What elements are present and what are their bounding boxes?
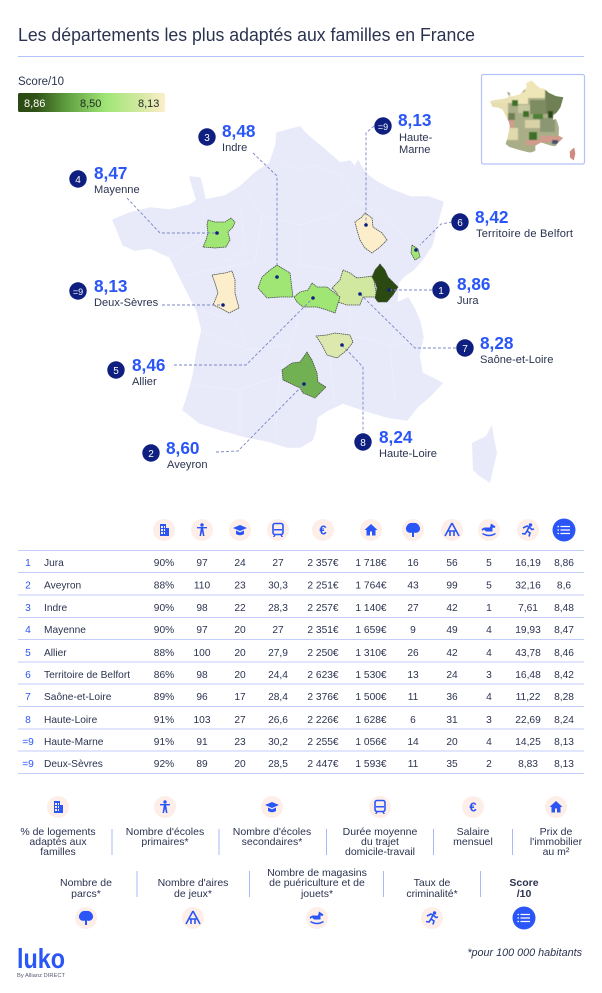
inset map of France xyxy=(482,74,584,164)
table row: Jura: 5 xyxy=(486,558,492,569)
table header icons xyxy=(153,518,576,542)
table row: Aveyron: 43 xyxy=(407,580,419,592)
department: Saône-et-Loire xyxy=(332,270,377,305)
table row: Jura: 97 xyxy=(196,558,208,569)
table row: Aveyron: 5 xyxy=(486,580,492,592)
table row: Saône-et-Loire: 8,28 xyxy=(554,692,574,703)
key: second row labels: jouets* xyxy=(300,888,333,900)
table row: Deux-Sèvres: 28,5 xyxy=(268,759,288,770)
table row: Territoire de Belfort: 13 xyxy=(407,670,419,681)
department: Jura xyxy=(372,264,398,302)
table row: Deux-Sèvres: 89 xyxy=(196,759,208,770)
table row: Jura: 1 718€ xyxy=(355,558,387,569)
table row: Mayenne: 19,93 xyxy=(515,625,541,636)
table row: Haute-Loire: 91% xyxy=(154,715,174,726)
table row: Allier: 88% xyxy=(154,648,174,659)
table row: Haute-Loire: 26,6 xyxy=(268,715,288,726)
table row: Aveyron: 32,16 xyxy=(515,580,541,592)
table row: Haute-Marne: 14,25 xyxy=(515,737,541,748)
table row: Aveyron: 23 xyxy=(234,580,246,592)
label: 8 Haute-Loire: 8,24 xyxy=(379,427,413,447)
label: 4 Mayenne: 4 xyxy=(75,175,81,186)
table row: Haute-Marne: 2 255€ xyxy=(307,737,339,748)
table row: Indre: 28,3 xyxy=(268,603,288,614)
table row: Jura: 8,86 xyxy=(554,558,574,569)
table row: Indre: Indre xyxy=(44,603,68,614)
table row: Territoire de Belfort: 20 xyxy=(234,670,246,681)
table row: Allier xyxy=(25,648,574,659)
legend: score scale: 8,13 xyxy=(138,98,159,110)
table row: Haute-Marne: 1 056€ xyxy=(355,737,387,748)
table row: Allier: 5 xyxy=(25,648,31,659)
department: Haute-Loire xyxy=(316,333,353,358)
label: 6 Territoire de Belfort xyxy=(451,207,573,240)
key: first row labels: Nombre d'écoles xyxy=(233,826,311,838)
icon: salary xyxy=(312,519,334,541)
table lines xyxy=(18,550,584,774)
table row: Haute-Loire: 2 226€ xyxy=(307,715,339,726)
key: first row labels: Salaire xyxy=(457,826,490,838)
key: first row labels: Nombre d'écoles xyxy=(126,826,204,838)
table row: Allier: 27,9 xyxy=(268,648,288,659)
table row: Allier: 2 250€ xyxy=(307,648,339,659)
label: 1 Jura: 8,86 xyxy=(457,274,490,294)
key: dividers xyxy=(112,829,512,897)
table row: Indre: 1 xyxy=(486,603,492,614)
table row: Aveyron: 88% xyxy=(154,580,174,592)
table row: Jura: 16 xyxy=(407,558,419,569)
icon: crime rate xyxy=(517,519,539,541)
key: second row labels: de jeux* xyxy=(174,888,212,900)
table row: Haute-Loire: 103 xyxy=(194,715,211,726)
label: 7 Saône-et-Loire: Saône-et-Loire xyxy=(480,354,553,366)
table row: Indre: 22 xyxy=(234,603,246,614)
table row: Deux-Sèvres: 20 xyxy=(234,759,246,770)
table row: Territoire de Belfort: Territoire de Belfort xyxy=(44,670,130,681)
icon: housing xyxy=(47,796,69,818)
table row: Saône-et-Loire: 17 xyxy=(234,692,246,703)
table row: Haute-Loire: 31 xyxy=(446,715,458,726)
icon: commute xyxy=(369,796,391,818)
label: 6 Territoire de Belfort: Territoire de Belfort xyxy=(476,228,573,240)
table row: Indre: 8,48 xyxy=(554,603,574,614)
icon: playgrounds xyxy=(441,519,463,541)
legend: score scale xyxy=(18,76,165,112)
key: first row labels: l'immobilier xyxy=(530,836,583,848)
department: Deux-Sèvres xyxy=(212,271,239,313)
legend: score scale: 8,86 xyxy=(24,98,45,110)
table row: Jura: 16,19 xyxy=(515,558,541,569)
key: first row labels: domicile-travail xyxy=(345,846,415,858)
table row: Saône-et-Loire: 7 xyxy=(25,692,31,703)
key: second row labels: Nombre de xyxy=(60,877,112,889)
icon: score xyxy=(512,906,536,930)
label: 4 Mayenne xyxy=(69,163,140,196)
icon: parks xyxy=(402,519,424,541)
icon: secondary school xyxy=(229,519,251,541)
key: first row labels: adaptés aux xyxy=(29,836,87,848)
label: 3 Indre: 8,48 xyxy=(222,121,256,141)
department: Aveyron xyxy=(282,352,326,398)
label: 6 Territoire de Belfort: 6 xyxy=(457,218,463,229)
table row: Indre: 3 xyxy=(25,603,31,614)
label: 8 Haute-Loire: Haute-Loire xyxy=(379,448,437,460)
table row: Haute-Marne: 23 xyxy=(234,737,246,748)
table row: Saône-et-Loire: 4 xyxy=(486,692,492,703)
table row: Saône-et-Loire: Saône-et-Loire xyxy=(44,692,112,703)
label: 5 Allier: 5 xyxy=(113,366,119,377)
table row: Indre: 7,61 xyxy=(518,603,538,614)
department: Indre xyxy=(258,265,293,298)
table row: Haute-Loire: 1 628€ xyxy=(355,715,387,726)
icon: salary: € xyxy=(469,800,477,814)
key: first row labels: primaires* xyxy=(141,836,189,848)
key: first row labels: Durée moyenne xyxy=(343,826,418,838)
table row: Mayenne xyxy=(25,625,574,636)
key: first row labels: % de logements xyxy=(20,826,96,838)
key: second row icons xyxy=(75,906,536,930)
table row: Saône-et-Loire xyxy=(25,692,574,703)
table row: Mayenne: 90% xyxy=(154,625,174,636)
table row: Deux-Sèvres: 1 593€ xyxy=(355,759,387,770)
icon: property price xyxy=(545,796,567,818)
table row: Mayenne: 9 xyxy=(410,625,416,636)
leader lines xyxy=(127,126,456,452)
table row: Aveyron: 2 xyxy=(25,580,31,592)
label: 2 Aveyron: 8,60 xyxy=(166,438,199,458)
map of France xyxy=(113,127,497,483)
table row: Haute-Loire xyxy=(25,715,574,726)
table row: Territoire de Belfort: 2 623€ xyxy=(307,670,339,681)
table row: Haute-Loire: 27 xyxy=(234,715,246,726)
table row: Indre: 98 xyxy=(196,603,208,614)
table row: Haute-Marne: 91 xyxy=(196,737,208,748)
label: 6 Territoire de Belfort: 8,42 xyxy=(475,207,508,227)
table row: Indre: 27 xyxy=(407,603,419,614)
table row: Jura xyxy=(25,558,574,569)
table row: Deux-Sèvres: Deux-Sèvres xyxy=(44,759,103,770)
icon: playgrounds xyxy=(182,907,204,929)
icon: salary: € xyxy=(319,522,327,538)
key: first row labels: au m² xyxy=(543,846,570,858)
table row: Indre: 42 xyxy=(446,603,458,614)
table row: Haute-Loire: 6 xyxy=(410,715,416,726)
table row: Deux-Sèvres: 2 447€ xyxy=(307,759,339,770)
label: =9 Deux-Sèvres xyxy=(69,276,159,309)
table row: Jura: Jura xyxy=(44,558,64,569)
icon: housing xyxy=(153,519,175,541)
key: first row icons xyxy=(47,796,567,818)
table row: Aveyron: 30,3 xyxy=(268,580,288,592)
table row: Territoire de Belfort: 6 xyxy=(25,670,31,681)
table row: Saône-et-Loire: 36 xyxy=(446,692,458,703)
table row: Haute-Marne: 4 xyxy=(486,737,492,748)
table row: Deux-Sèvres: 92% xyxy=(154,759,174,770)
table row: Jura: 1 xyxy=(25,558,31,569)
table row: Aveyron: 110 xyxy=(194,580,210,592)
label: =9 Deux-Sèvres: Deux-Sèvres xyxy=(94,297,159,309)
legend: score scale: Score/10 xyxy=(18,76,64,88)
icon: commute xyxy=(267,519,289,541)
icon: score xyxy=(552,518,576,542)
key: second row labels: criminalité* xyxy=(406,888,458,900)
footnote: *pour 100 000 habitants xyxy=(467,947,583,959)
table row: Jura: 90% xyxy=(154,558,174,569)
table row: Mayenne: 4 xyxy=(25,625,31,636)
department: Haute-Marne xyxy=(355,213,387,253)
table row: Indre: 90% xyxy=(154,603,174,614)
icon: toy stores xyxy=(478,519,500,541)
table row: Territoire de Belfort: 98 xyxy=(196,670,208,681)
table row: Allier: 8,46 xyxy=(554,648,574,659)
table row: Mayenne: 2 351€ xyxy=(307,625,339,636)
department: Mayenne xyxy=(203,218,235,248)
key: first row labels: familles xyxy=(40,846,76,858)
table row: Indre: 2 257€ xyxy=(307,603,339,614)
table row: Saône-et-Loire: 11 xyxy=(408,692,419,703)
label: 1 Jura: Jura xyxy=(457,295,479,307)
icon: parks xyxy=(75,907,97,929)
table row: Jura: 2 357€ xyxy=(307,558,339,569)
icon: salary xyxy=(462,796,484,818)
table row: Haute-Marne: 14 xyxy=(407,737,419,748)
table row: Aveyron: 8,6 xyxy=(557,580,571,592)
label: 7 Saône-et-Loire xyxy=(456,333,553,366)
table row: Saône-et-Loire: 1 500€ xyxy=(355,692,387,703)
table row: Allier: 100 xyxy=(194,648,211,659)
table row: Territoire de Belfort: 16,48 xyxy=(515,670,541,681)
table row: Aveyron: Aveyron xyxy=(44,580,81,592)
table row: Territoire de Belfort: 1 530€ xyxy=(355,670,387,681)
table row: Allier: 26 xyxy=(407,648,419,659)
table row: Mayenne: 49 xyxy=(446,625,458,636)
label: 7 Saône-et-Loire: 7 xyxy=(462,344,468,355)
table row: Saône-et-Loire: 89% xyxy=(154,692,174,703)
logo: luko: luko xyxy=(17,943,65,974)
icon: secondary school xyxy=(261,796,283,818)
table row: Haute-Marne: 20 xyxy=(446,737,458,748)
table row: Deux-Sèvres: 35 xyxy=(446,759,458,770)
key: first row labels: secondaires* xyxy=(242,836,302,848)
key: first row labels: du trajet xyxy=(361,836,399,848)
table row: Deux-Sèvres: 11 xyxy=(408,759,419,770)
table row: Jura: 27 xyxy=(272,558,284,569)
icon: toy stores xyxy=(306,907,328,929)
label: 2 Aveyron: Aveyron xyxy=(167,459,208,471)
table row: Territoire de Belfort: 8,42 xyxy=(554,670,574,681)
table row: Aveyron: 2 251€ xyxy=(307,580,339,592)
key: second row labels xyxy=(60,867,539,900)
label: 7 Saône-et-Loire: 8,28 xyxy=(480,333,514,353)
department: Allier xyxy=(294,283,340,313)
table row: Saône-et-Loire: 28,4 xyxy=(268,692,288,703)
title: Les départements les plus adaptés aux familles en France xyxy=(18,24,475,45)
table row: Haute-Loire: 22,69 xyxy=(515,715,541,726)
table row: Aveyron: 1 764€ xyxy=(355,580,387,592)
label: 1 Jura: 1 xyxy=(438,286,444,297)
label: =9 Deux-Sèvres: 8,13 xyxy=(94,276,127,296)
table row: Haute-Loire: Haute-Loire xyxy=(44,715,98,726)
icon: crime rate xyxy=(421,907,443,929)
table row: Saône-et-Loire: 11,22 xyxy=(516,692,541,703)
key: second row labels: Score xyxy=(509,877,539,889)
table row: Deux-Sèvres: 2 xyxy=(486,759,492,770)
label: 5 Allier: Allier xyxy=(132,376,157,388)
key: first row labels: mensuel xyxy=(453,836,493,848)
label: 8 Haute-Loire xyxy=(354,427,437,460)
table row: Allier: 20 xyxy=(234,648,246,659)
key: second row labels: parcs* xyxy=(71,888,101,900)
table row: Haute-Loire: 8 xyxy=(25,715,31,726)
table row: Jura: 24 xyxy=(234,558,246,569)
legend: score scale: 8,50 xyxy=(80,98,101,110)
label: =9 Haute-Marne: =9 xyxy=(378,122,388,132)
label: 4 Mayenne: Mayenne xyxy=(94,184,140,196)
table row: Aveyron: 99 xyxy=(446,580,458,592)
table row: Allier: 43,78 xyxy=(515,648,541,659)
table row: Saône-et-Loire: 2 376€ xyxy=(307,692,339,703)
table row: Mayenne: 27 xyxy=(272,625,284,636)
label: =9 Haute-Marne xyxy=(374,110,433,156)
table row: Mayenne: 97 xyxy=(196,625,208,636)
table row: Haute-Loire: 3 xyxy=(486,715,492,726)
logo: luko: By Allianz DIRECT xyxy=(17,973,65,979)
key: first row labels: Prix de xyxy=(540,826,572,838)
key: second row labels: Taux de xyxy=(414,877,451,889)
icon: primary school xyxy=(154,796,176,818)
table row: Territoire de Belfort: 24,4 xyxy=(268,670,288,681)
label: 3 Indre: 3 xyxy=(204,133,210,144)
table row: Mayenne: Mayenne xyxy=(44,625,86,636)
table row: Allier: Allier xyxy=(44,648,67,659)
table row: Mayenne: 8,47 xyxy=(554,625,574,636)
label: 2 Aveyron: 2 xyxy=(148,449,154,460)
table row: Jura: 56 xyxy=(446,558,458,569)
table row: Mayenne: 20 xyxy=(234,625,246,636)
table row: Deux-Sèvres: 8,13 xyxy=(554,759,574,770)
label: =9 Haute-Marne: Marne xyxy=(399,144,430,156)
table row: Territoire de Belfort: 86% xyxy=(154,670,174,681)
table row: Territoire de Belfort xyxy=(25,670,574,681)
table row: Haute-Marne: 30,2 xyxy=(268,737,288,748)
table row: Indre xyxy=(25,603,574,614)
label: 5 Allier: 8,46 xyxy=(132,355,165,375)
table row: Haute-Marne: 91% xyxy=(154,737,174,748)
label: 3 Indre: Indre xyxy=(222,142,247,154)
table row: Deux-Sèvres: =9 xyxy=(22,759,34,770)
table row: Allier: 42 xyxy=(446,648,458,659)
table row: Haute-Loire: 8,24 xyxy=(554,715,574,726)
table row: Allier: 4 xyxy=(486,648,492,659)
table row: Indre: 1 140€ xyxy=(355,603,387,614)
label: =9 Haute-Marne: Haute- xyxy=(399,132,433,144)
key: second row labels: de puériculture et de xyxy=(269,877,365,889)
department: Territoire de Belfort xyxy=(411,245,420,260)
table row: Haute-Marne: Haute-Marne xyxy=(44,737,104,748)
label: =9 Deux-Sèvres: =9 xyxy=(73,287,83,297)
table row: Allier: 1 310€ xyxy=(355,648,387,659)
table row: Territoire de Belfort: 24 xyxy=(446,670,458,681)
key: first row labels xyxy=(20,826,583,858)
label: 1 Jura xyxy=(432,274,490,307)
table row: Mayenne: 1 659€ xyxy=(355,625,387,636)
table row: Deux-Sèvres: 8,83 xyxy=(518,759,538,770)
label: 8 Haute-Loire: 8 xyxy=(360,438,366,449)
label: 4 Mayenne: 8,47 xyxy=(94,163,127,183)
department markers xyxy=(215,223,418,386)
table row: Territoire de Belfort: 3 xyxy=(486,670,492,681)
label: 2 Aveyron xyxy=(142,438,208,471)
key: second row labels: Nombre de magasins xyxy=(267,867,367,879)
key: second row labels: Nombre d'aires xyxy=(158,877,228,889)
table row: Haute-Marne: 8,13 xyxy=(554,737,574,748)
icon: property price xyxy=(360,519,382,541)
table row: Deux-Sèvres xyxy=(22,759,574,770)
table row: Haute-Marne xyxy=(22,737,574,748)
label: 5 Allier xyxy=(107,355,165,388)
icon: primary school xyxy=(191,519,213,541)
table row: Mayenne: 4 xyxy=(486,625,492,636)
label: 3 Indre xyxy=(198,121,256,154)
table row: Saône-et-Loire: 96 xyxy=(196,692,208,703)
table row: Aveyron xyxy=(25,580,571,592)
label: =9 Haute-Marne: 8,13 xyxy=(398,110,431,130)
key: second row labels: /10 xyxy=(517,888,531,900)
table row: Haute-Marne: =9 xyxy=(22,737,34,748)
